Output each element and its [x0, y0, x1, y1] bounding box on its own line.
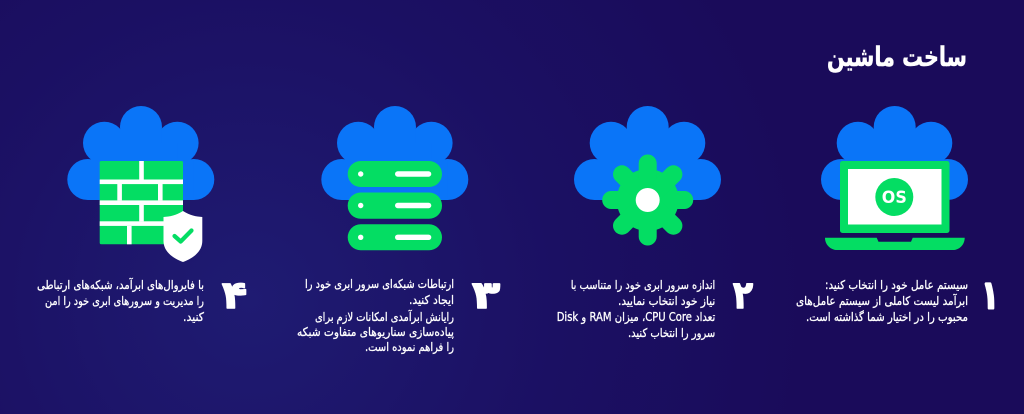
step 3 text: پیاده‌سازی سناریوهای متفاوت شبکه — [297, 325, 454, 340]
step 3 text: ارتباطات شبکه‌ای سرور ابری خود را — [305, 277, 454, 292]
step 1 text: سیستم عامل خود را انتخاب کنید: — [825, 278, 968, 293]
server 3 — [348, 224, 442, 250]
icon: cloud with laptop OS — [821, 106, 968, 250]
step 2 text: سرور را انتخاب کنید. — [628, 326, 715, 341]
icon: cloud with firewall and shield — [67, 106, 214, 262]
laptop screen — [840, 161, 950, 233]
step 3 number: ۳ — [472, 273, 500, 317]
step 3 text: را فراهم نموده است. — [365, 340, 454, 355]
step 2 text: اندازه سرور ابری خود را متناسب با — [571, 278, 715, 293]
cloud — [574, 106, 721, 200]
step 1 text — [796, 278, 968, 325]
OS badge — [875, 178, 913, 216]
step 4 text — [37, 277, 204, 324]
step 3 text: رایانش ابرآمدی امکانات لازم برای — [315, 309, 454, 325]
step 2 text — [557, 278, 715, 341]
step 1 text: محبوب را در اختیار شما گذاشته است. — [806, 310, 968, 325]
step 1 text: ابرآمد لیست کاملی از سیستم عامل‌های — [796, 293, 968, 309]
step 3 text — [297, 277, 454, 355]
title: ساخت ماشین — [827, 42, 967, 73]
OS badge: OS — [882, 188, 907, 208]
step 4 text: کنید. — [183, 310, 204, 324]
cloud — [821, 106, 968, 200]
step 3 text: ایجاد کنید. — [409, 293, 454, 307]
step 2 number: ۲ — [733, 273, 753, 317]
cloud — [67, 106, 214, 200]
step 4 text: با فایروال‌های ابرآمد، شبکه‌های ارتباطی — [37, 277, 204, 293]
laptop base — [825, 238, 965, 250]
step 4 number: ۴ — [222, 273, 247, 317]
step 4 text: را مدیریت و سرورهای ابری خود را امن — [45, 294, 204, 309]
icon: cloud with servers — [321, 106, 468, 250]
step 2 text: نیاز خود انتخاب نمایید. — [618, 294, 715, 309]
step 2 text: تعداد CPU Core، میزان RAM و Disk — [557, 310, 715, 325]
server 2 — [348, 192, 442, 219]
brick wall — [100, 161, 183, 244]
step 1 number: ۱ — [982, 273, 998, 317]
server 1 — [348, 161, 442, 187]
icon: cloud with gear — [574, 106, 721, 236]
cloud — [321, 106, 468, 200]
shield — [164, 211, 202, 262]
gear — [611, 164, 684, 236]
